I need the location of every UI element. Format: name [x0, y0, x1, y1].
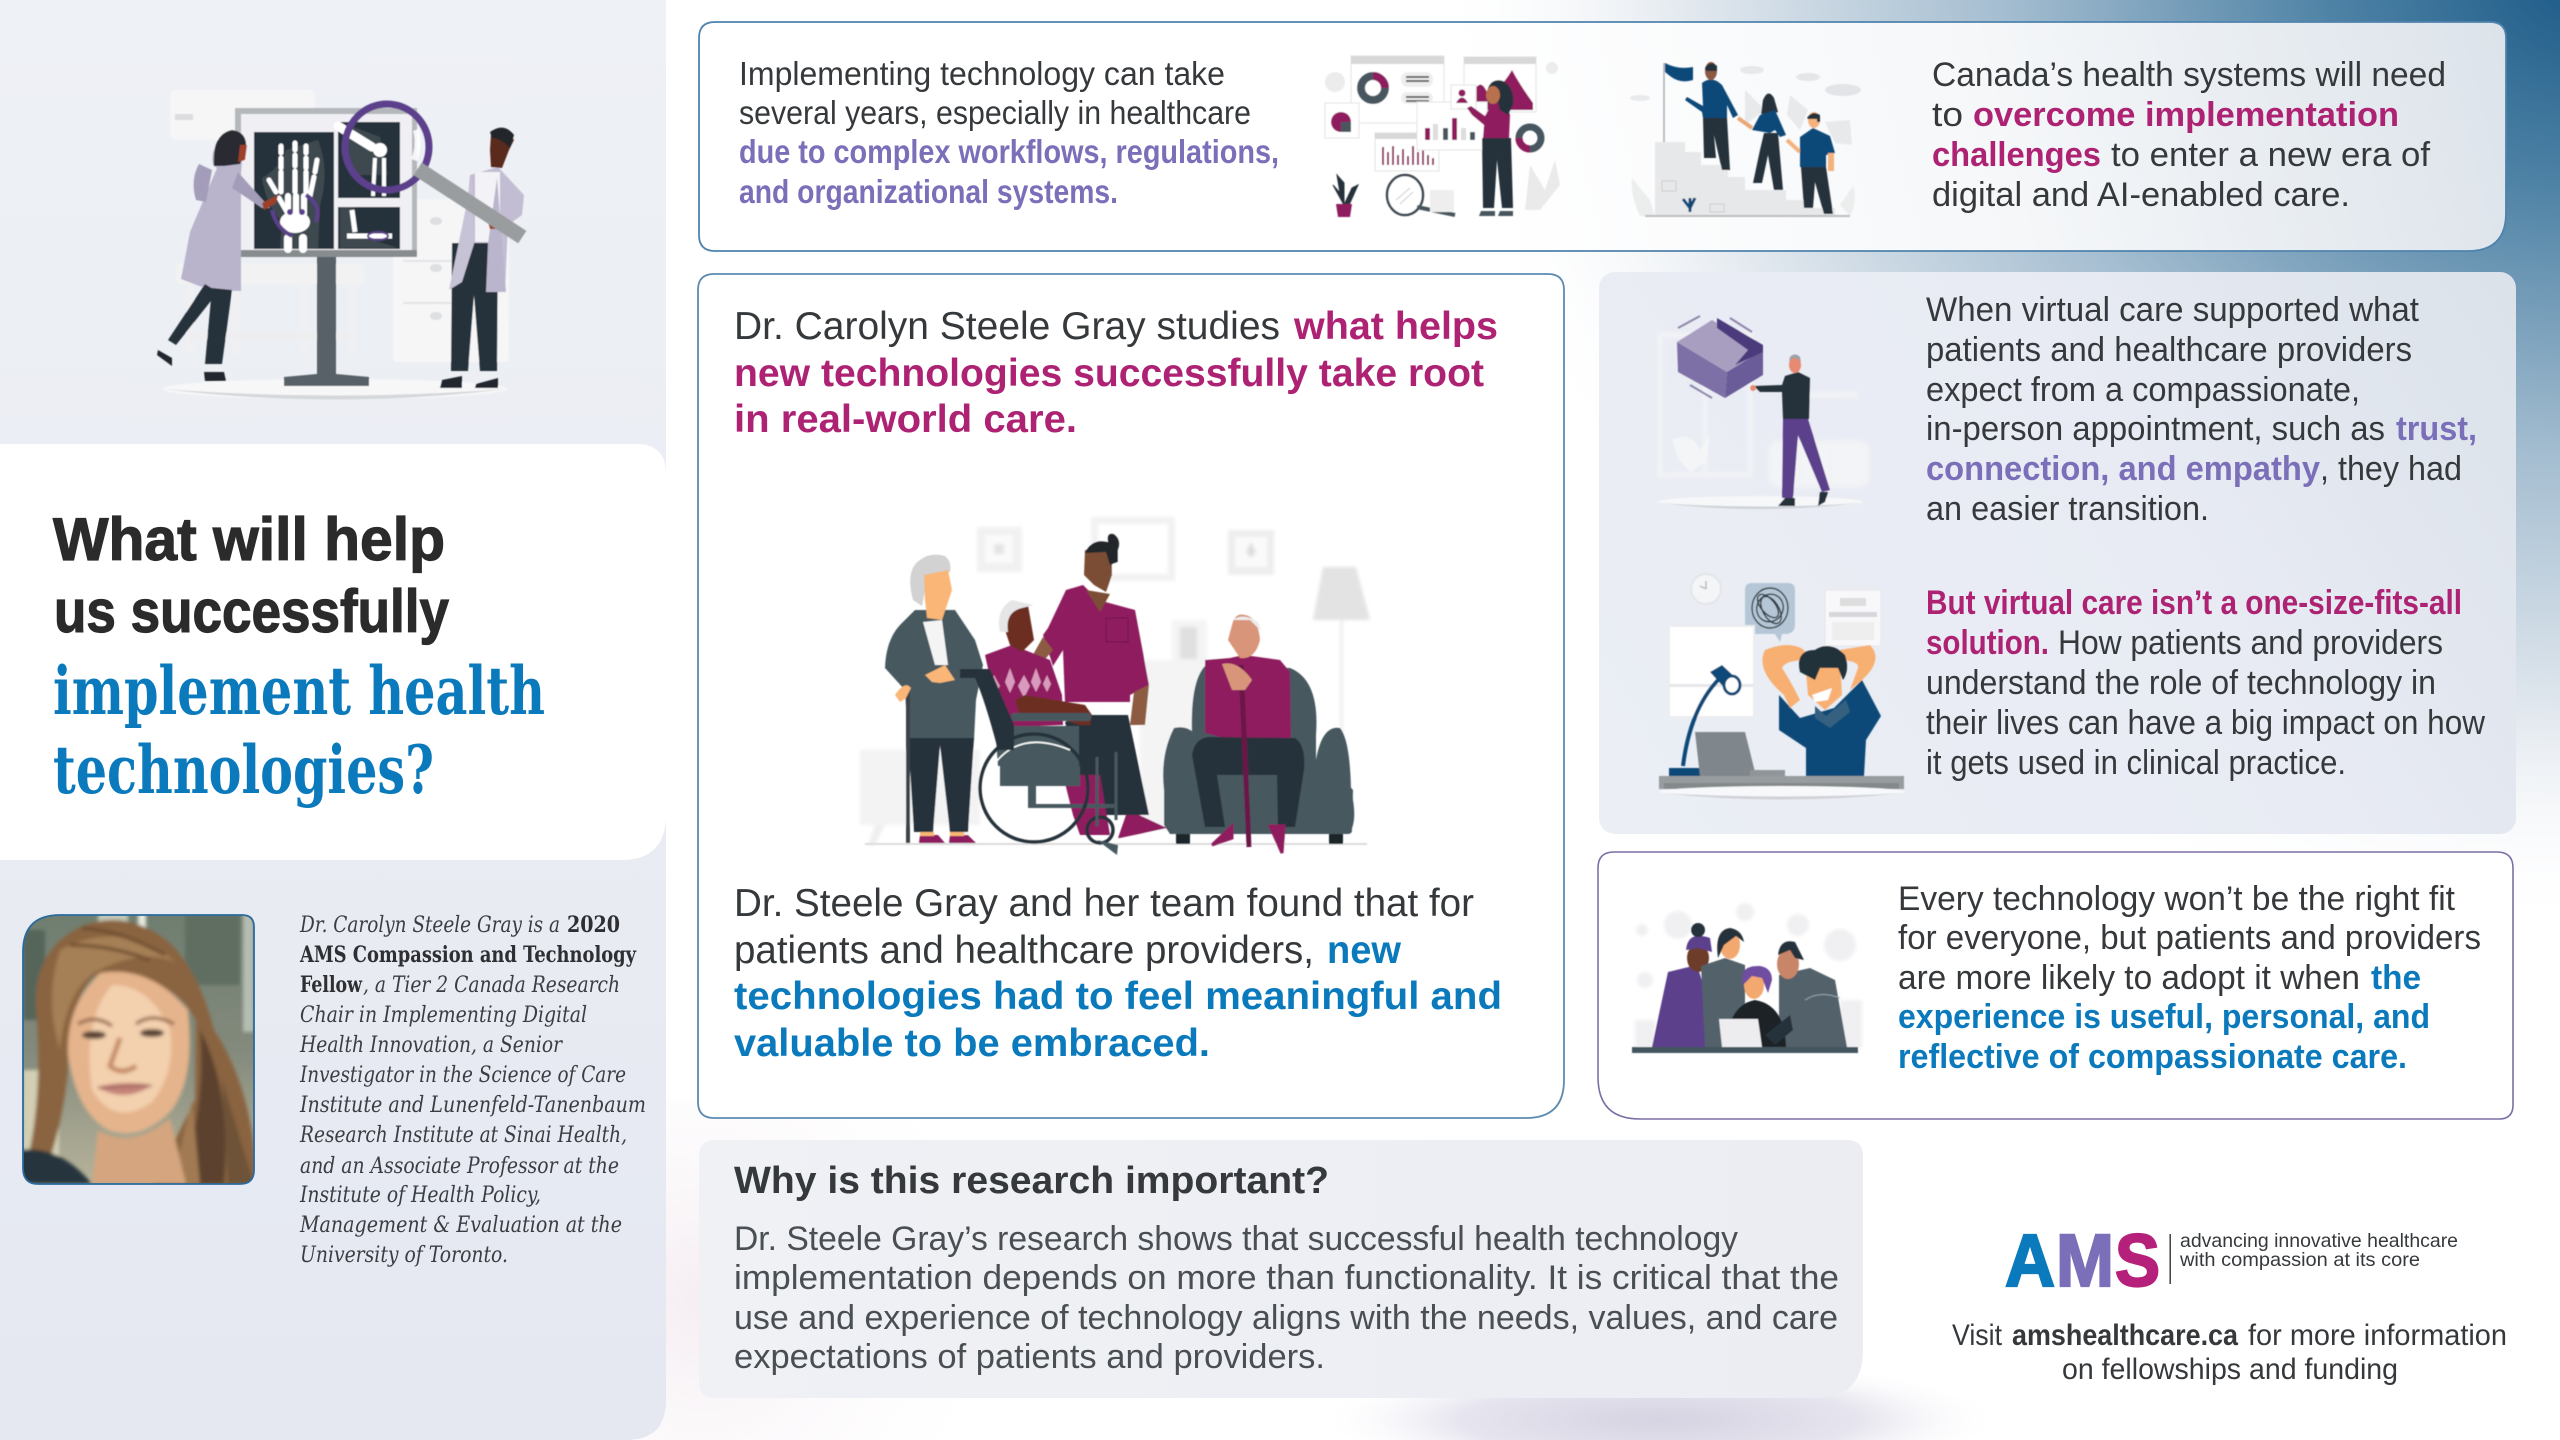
text block: virtual care expectations: expect from a compassionate,	[1926, 371, 2360, 409]
text block: biography: Research Institute at Sinai Health,	[299, 1122, 627, 1148]
logo: AMS: advancing innovative healthcare	[2180, 1230, 2458, 1252]
text block: biography: Chair in Implementing Digital	[300, 1002, 587, 1028]
photo: Dr. Carolyn Steele Gray	[20, 912, 258, 1190]
text block: biography: Institute and Lunenfeld-Tanenbaum	[299, 1092, 646, 1118]
heading: implement health technologies: technologies?	[53, 731, 434, 809]
text block: overcome implementation challenges: to	[1932, 96, 1963, 134]
logo: AMS: A	[2005, 1219, 2055, 1302]
text block: biography: Health Innovation, a Senior	[299, 1032, 563, 1058]
heading: what will help us successfully	[53, 506, 450, 645]
text block: one size does not fit all: But virtual care isn’t a one-size-fits-all	[1926, 584, 2462, 622]
text block: one size does not fit all: it gets used in clinical practice.	[1926, 744, 2346, 782]
heading: why is this research important: Why is this research important?	[734, 1160, 1329, 1202]
text block: team findings: technologies had to feel meaningful and	[734, 975, 1502, 1018]
text block: virtual care expectations: patients and healthcare providers	[1926, 331, 2412, 369]
logo: AMS	[2005, 1219, 2458, 1302]
text block: one size does not fit all: solution.	[1926, 624, 2049, 662]
text block: useful, personal, compassionate: Every technology won’t be the right fit	[1898, 880, 2456, 918]
logo: AMS: with compassion at its core	[2179, 1249, 2420, 1271]
text block: research summary: Dr. Steele Gray’s research shows that successful health technology	[734, 1220, 1738, 1258]
text block: useful, personal, compassionate: experience is useful, personal, and	[1898, 998, 2430, 1036]
text block: website call to action: Visit	[1952, 1319, 2003, 1352]
text block: what helps new technologies take root: new technologies successfully take root	[734, 352, 1484, 395]
heading: implement health technologies: implement health	[53, 652, 545, 730]
text block: virtual care expectations: connection, and empathy	[1926, 450, 2320, 488]
text block: website call to action: amshealthcare.ca	[2012, 1319, 2238, 1352]
text block: biography	[299, 912, 646, 1268]
text block: virtual care expectations: trust,	[2396, 410, 2477, 448]
text block: implementing technology takes years: and organizational systems.	[739, 173, 1118, 210]
text block: biography: Institute of Health Policy,	[299, 1182, 541, 1208]
text block: implementing technology takes years: several years, especially in healthcare	[739, 94, 1251, 131]
text block: useful, personal, compassionate: for everyone, but patients and providers	[1898, 919, 2481, 957]
text block: biography: AMS Compassion and Technology	[299, 942, 637, 968]
panel: why this research is important	[699, 1140, 1863, 1398]
logo: AMS: S	[2115, 1219, 2160, 1302]
text block: research summary	[734, 1220, 1839, 1376]
text block: team findings: Dr. Steele Gray and her team found that for	[734, 882, 1474, 925]
panel: what helps technologies take root	[698, 274, 1564, 1118]
text block: virtual care expectations: in-person appointment, such as	[1926, 410, 2385, 448]
text block: virtual care expectations	[1926, 291, 2477, 528]
text block: overcome implementation challenges: challenges	[1932, 136, 2101, 174]
text block: team findings: patients and healthcare providers,	[734, 929, 1314, 972]
panel: left column	[0, 0, 666, 1440]
illustration: team climbing stairs	[1630, 62, 1861, 216]
text block: team findings: new	[1327, 929, 1402, 972]
text block: useful, personal, compassionate: reflective of compassionate care.	[1898, 1038, 2407, 1076]
text block: biography: Management & Evaluation at the	[299, 1212, 622, 1238]
text block: biography: Dr. Carolyn Steele Gray is a	[299, 912, 560, 938]
illustration: woman with data dashboards	[1325, 56, 1560, 217]
text block: virtual care expectations: When virtual care supported what	[1926, 291, 2420, 329]
text block: virtual care expectations: , they had	[2320, 450, 2462, 488]
text block: biography: Fellow	[300, 972, 362, 998]
text block: website call to action: on fellowships and funding	[2062, 1353, 2398, 1386]
text block: biography: , a Tier 2 Canada Research	[363, 972, 620, 998]
text block: what helps new technologies take root: in real-world care.	[734, 398, 1077, 441]
illustration: man with a 3D cube	[1657, 316, 1867, 509]
text block: what helps new technologies take root: Dr. Carolyn Steele Gray studies	[734, 305, 1280, 348]
text block: useful, personal, compassionate: are more likely to adopt it when	[1898, 959, 2360, 997]
text block: implementing technology takes years: due to complex workflows, regulations,	[739, 133, 1279, 170]
heading: what will help us successfully: us successfully	[54, 578, 450, 645]
text block: useful, personal, compassionate	[1898, 880, 2481, 1076]
text block: research summary: implementation depends on more than functionality. It is critical that the	[734, 1259, 1839, 1297]
illustration: stressed man at a desk	[1659, 574, 1905, 800]
text block: biography: 2020	[567, 912, 620, 938]
text block: what helps new technologies take root	[734, 305, 1498, 441]
text block: virtual care expectations: an easier transition.	[1926, 490, 2209, 528]
text block: useful, personal, compassionate: the	[2371, 959, 2421, 997]
text block: implementing technology takes years: Implementing technology can take	[739, 55, 1225, 92]
text block: overcome implementation challenges: Canada’s health systems will need	[1932, 56, 2446, 94]
illustration: older adults with a care provider	[860, 517, 1370, 855]
panel: virtual care findings	[1599, 272, 2516, 834]
text block: website call to action: for more information	[2248, 1319, 2507, 1352]
text block: one size does not fit all: How patients and providers	[2058, 624, 2443, 662]
text block: team findings	[734, 882, 1502, 1065]
panel: adoption	[1598, 852, 2513, 1119]
heading: what will help us successfully: What will help	[53, 506, 445, 573]
text block: website call to action	[1952, 1319, 2507, 1386]
heading: implement health technologies	[53, 652, 545, 809]
text block: one size does not fit all: their lives can have a big impact on how	[1926, 704, 2485, 742]
logo: AMS: M	[2056, 1219, 2114, 1302]
text block: biography: Investigator in the Science of Care	[299, 1062, 626, 1088]
text block: overcome implementation challenges: overcome implementation	[1973, 96, 2399, 134]
text block: team findings: valuable to be embraced.	[734, 1022, 1210, 1065]
panel: implementation challenges	[699, 22, 2506, 251]
text block: one size does not fit all: understand the role of technology in	[1926, 664, 2436, 702]
text block: research summary: expectations of patients and providers.	[734, 1338, 1325, 1376]
text block: what helps new technologies take root: what helps	[1293, 305, 1498, 348]
illustration: clinicians reviewing x-rays	[157, 90, 524, 400]
text block: one size does not fit all	[1926, 584, 2485, 782]
text block: overcome implementation challenges	[1932, 56, 2446, 214]
text block: overcome implementation challenges: to enter a new era of	[2111, 136, 2431, 174]
text block: biography: and an Associate Professor at the	[300, 1153, 619, 1179]
text block: overcome implementation challenges: digital and AI-enabled care.	[1932, 176, 2350, 214]
illustration: group around a laptop	[1632, 903, 1862, 1053]
text block: implementing technology takes years	[739, 55, 1279, 210]
text block: research summary: use and experience of technology aligns with the needs, values, and care	[734, 1299, 1838, 1337]
panel: title	[0, 444, 666, 860]
text block: biography: University of Toronto.	[300, 1242, 508, 1268]
